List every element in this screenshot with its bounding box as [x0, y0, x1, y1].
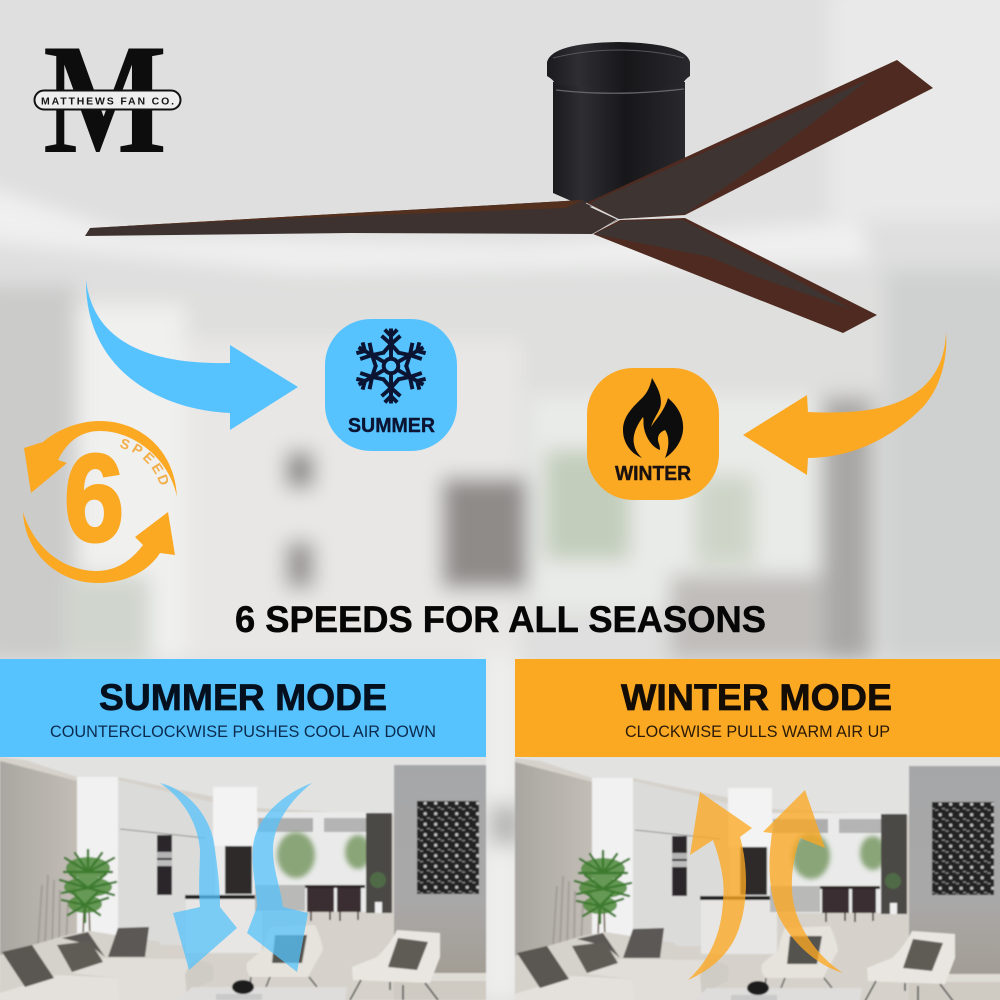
arrow: warm air left: [688, 792, 752, 980]
subtitle: summer: COUNTERCLOCKWISE PUSHES COOL AIR DOWN: [50, 722, 436, 741]
panel: summer mode: [0, 659, 486, 1000]
fan blade: left: [85, 200, 618, 236]
subtitle: winter: CLOCKWISE PULLS WARM AIR UP: [625, 722, 890, 741]
fan blade: upper right: [586, 60, 933, 219]
room photo: winter: [515, 758, 1000, 1000]
fan blade: lower right: [593, 218, 877, 333]
heading: summer mode: SUMMER MODE: [99, 677, 387, 718]
title: 6 SPEEDS FOR ALL SEASONS: [235, 599, 766, 640]
arrow: cool air right: [247, 783, 312, 972]
upper arc arrow: [24, 421, 177, 497]
speed label: S: [118, 435, 132, 453]
logo: Matthews Fan Co.: MATTHEWS FAN CO.: [41, 96, 174, 108]
room photo: summer: [0, 757, 486, 1000]
arrow: cool air left: [160, 783, 237, 970]
speed label: P: [129, 440, 146, 458]
heading bar: summer: [0, 659, 486, 757]
logo: Matthews Fan Co.: M: [43, 12, 167, 187]
arrow: warm air right: [763, 790, 843, 973]
label: summer: SUMMER: [348, 415, 436, 437]
lower arc arrow: [23, 512, 175, 583]
heading bar: winter: [515, 659, 1000, 757]
speed label: D: [154, 472, 173, 488]
icon: flame: [623, 378, 683, 458]
badge: winter: [587, 368, 719, 500]
icon: 6 speed: [23, 421, 177, 583]
ceiling fan: [85, 42, 933, 333]
label: winter: WINTER: [615, 463, 692, 485]
badge: summer: [325, 319, 457, 451]
speed label: E: [148, 460, 167, 477]
icon: snowflake: [354, 329, 428, 403]
arrow: summer air (blue): [86, 280, 298, 430]
arrow: winter air (orange): [743, 332, 946, 475]
speed label: [118, 435, 173, 488]
fan motor housing: [547, 42, 690, 207]
numeral 6: 6: [64, 430, 124, 568]
heading: winter mode: WINTER MODE: [621, 677, 892, 718]
panel: winter mode: [515, 659, 1000, 1000]
speed label: E: [140, 449, 158, 467]
